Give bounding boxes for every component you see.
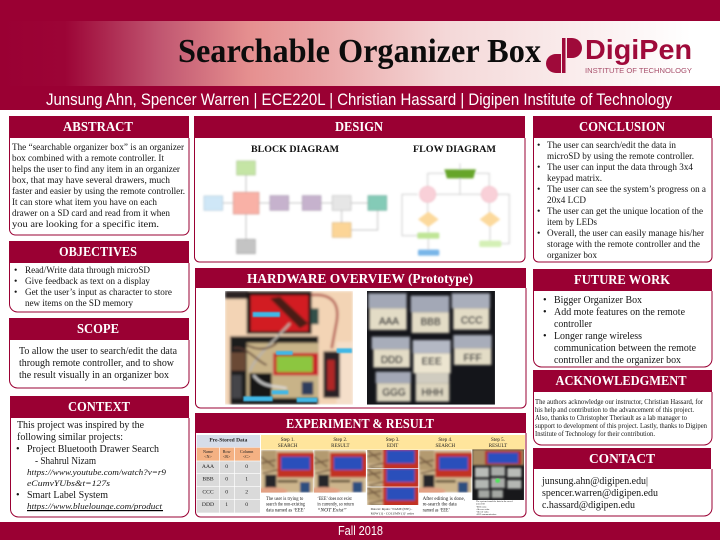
table: pre-stored data: 0 — [225, 477, 228, 483]
flow diagram — [402, 163, 509, 256]
future work list — [543, 295, 696, 366]
table: pre-stored data: DDD — [202, 502, 214, 508]
step captions: search the non-existing — [266, 502, 305, 508]
conclusion list — [537, 141, 707, 261]
heading: design: DESIGN — [335, 120, 383, 135]
acknowledgment text: his help and contribution to the advancement of this project. — [535, 406, 694, 414]
context text: Smart Label System — [27, 490, 108, 501]
panel: design — [194, 116, 525, 262]
step captions: ROW (1) - COLUMN (1)’ order — [371, 511, 415, 515]
step headers: RESULT — [331, 444, 350, 449]
step headers: SEARCH — [435, 444, 456, 449]
table: pre-stored data: 2 — [245, 490, 248, 496]
heading: conclusion: CONCLUSION — [579, 120, 665, 135]
block diagram heading: BLOCK DIAGRAM — [251, 145, 339, 155]
table: pre-stored data: 0 — [225, 464, 228, 470]
photo: labelled organizer drawers: HHH — [421, 388, 443, 399]
conclusion list: organizer box — [547, 251, 597, 261]
step captions: The system found the data in the saved — [476, 500, 513, 503]
photo: labelled organizer drawers: DDD — [381, 355, 402, 366]
acknowledgment text: Institute of Technology for their contribution. — [535, 430, 655, 438]
footer band — [0, 522, 720, 540]
conclusion list: Overall, the user can easily manage his/her — [547, 229, 705, 239]
future work list: • — [543, 307, 547, 318]
title: Searchable Organizer Box — [178, 33, 541, 70]
table: pre-stored data: CCC — [202, 490, 214, 496]
abstract text: drawer on a SD card and read from it when — [12, 208, 170, 219]
heading: hardware overview: HARDWARE OVERVIEW (Prototype) — [247, 272, 473, 287]
table: pre-stored data: AAA — [202, 464, 215, 470]
photo: labelled organizer drawers — [367, 291, 495, 405]
context text: https://www.bluelounge.com/product — [27, 501, 163, 511]
step captions — [266, 495, 513, 516]
panel: acknowledgment — [533, 370, 712, 445]
flow diagram heading: FLOW DIAGRAM — [413, 145, 496, 155]
panel: context — [10, 396, 189, 517]
authors line: Junsung Ahn, Spencer Warren | ECE220L | Christian Hassard | Digipen Institute of Technology — [46, 91, 673, 109]
table: pre-stored data: 1 — [245, 477, 248, 483]
step captions: re-search the data — [423, 502, 457, 508]
photo: labelled organizer drawers: CCC — [461, 316, 482, 327]
scope text: the result visually in an organizer box — [19, 370, 170, 381]
panel: contact — [533, 448, 712, 516]
future work list: controller — [554, 319, 593, 330]
step headers: Step 4. — [438, 438, 452, 443]
footer text: Fall 2018 — [338, 524, 383, 538]
step headers: Step 5. — [491, 438, 505, 443]
photo: labelled organizer drawers: EEE — [422, 356, 442, 367]
step captions: data named as ‘EEE’ — [266, 507, 305, 514]
photos: LCD steps — [254, 443, 524, 525]
heading: future work: FUTURE WORK — [574, 273, 670, 288]
table: pre-stored data: Name — [203, 449, 213, 454]
future work list: Bigger Organizer Box — [554, 295, 643, 306]
step captions: -LED communication — [476, 513, 497, 516]
objectives list — [14, 266, 172, 309]
step headers: EDIT — [387, 444, 398, 449]
step headers: Step 3. — [386, 438, 400, 443]
conclusion list: • — [537, 141, 540, 151]
scope text — [19, 346, 177, 381]
conclusion list: 20x4 LCD — [547, 196, 586, 206]
table: pre-stored data: 0 — [225, 490, 228, 496]
acknowledgment text — [535, 398, 707, 438]
heading: acknowledgment: ACKNOWLEDGMENT — [556, 374, 687, 389]
abstract text: helps the user to find any item in an organizer — [12, 164, 181, 175]
contact emails: junsung.ahn@digipen.edu| — [541, 476, 648, 487]
conclusion list: storage with the remote controller and the — [547, 240, 700, 250]
table: pre-stored data: Column — [240, 449, 254, 454]
context text: Project Bluetooth Drawer Search — [27, 444, 160, 455]
step captions: “NOT Exist” — [317, 507, 347, 514]
context text: This project was inspired by the — [17, 420, 144, 431]
conclusion list: The user can input the data through 3x4 — [547, 163, 693, 173]
block diagram — [204, 161, 387, 254]
contact emails: spencer.warren@digipen.edu — [542, 488, 658, 499]
context text: - Shahrul Nizam — [35, 456, 96, 467]
objectives list: Get the user’s input as character to store — [25, 288, 172, 298]
icon: DigiPen logo mark — [546, 38, 582, 73]
panel: future work — [533, 269, 712, 367]
step captions: ‘EEE’ does not exist — [317, 495, 352, 502]
future work list: Longer range wireless — [554, 331, 642, 342]
step captions: -EEE name — [476, 505, 487, 508]
scope text: through remote controller, and to show — [19, 358, 175, 369]
page header band — [0, 0, 720, 110]
objectives list: • — [14, 266, 17, 276]
contact emails: c.hassard@digipen.edu — [542, 500, 635, 511]
context text: https://www.youtube.com/watch?v=r9 — [27, 467, 167, 477]
table: pre-stored data: 1 — [225, 502, 228, 508]
conclusion list: • — [537, 229, 540, 239]
context text: eCumvYUbs&t=127s — [27, 478, 111, 488]
table: pre-stored data: Pre-Stored Data — [209, 438, 248, 444]
table: pre-stored data: <R> — [223, 454, 231, 459]
panel: abstract — [9, 116, 189, 235]
acknowledgment text: The authors acknowledge our instructor, Christian Hassard, for — [535, 398, 704, 406]
photo: prototype electronics — [225, 291, 353, 405]
table: pre-stored data: <N> — [204, 454, 212, 459]
acknowledgment text: Also, thanks to Christopher Theriault as a lab manager to — [535, 414, 687, 422]
heading: scope: SCOPE — [77, 322, 119, 337]
photo: labelled organizer drawers: AAA — [379, 316, 399, 327]
heading: objectives: OBJECTIVES — [59, 245, 137, 260]
heading: abstract: ABSTRACT — [63, 120, 134, 135]
abstract text: faster and easier by using the remote controller. — [12, 186, 185, 197]
objectives list: Give feedback as text on a display — [25, 276, 150, 287]
logo subtitle: INSTITUTE OF TECHNOLOGY — [585, 66, 692, 75]
panel: hardware overview — [195, 268, 526, 408]
table: pre-stored data: 0 — [245, 502, 248, 508]
heading: context: CONTEXT — [68, 400, 131, 415]
conclusion list: item by LEDs — [547, 218, 597, 228]
table: pre-stored data: 0 — [245, 464, 248, 470]
photo: labelled organizer drawers: FFF — [463, 353, 482, 364]
future work list: communication between the remote — [554, 343, 696, 354]
panel: experiment and result — [195, 413, 526, 525]
context text: following similar projects: — [17, 432, 123, 443]
abstract text — [12, 142, 185, 230]
context text — [16, 420, 167, 511]
logo wordmark: DigiPen — [585, 34, 692, 65]
step headers: SEARCH — [278, 444, 298, 449]
future work list: • — [543, 295, 547, 306]
conclusion list: • — [537, 163, 540, 173]
abstract text: box combined with a remote controller. It — [12, 153, 164, 164]
conclusion list: The user can see the system’s progress on a — [547, 185, 707, 195]
step captions: The user is trying to — [266, 496, 304, 502]
abstract text: The “searchable organizer box” is an organizer — [12, 142, 185, 153]
table: pre-stored data — [197, 435, 260, 513]
step captions: After editing is done, — [423, 495, 466, 502]
conclusion list: The user can get the unique location of the — [547, 206, 703, 217]
step captions: -1th row value — [476, 508, 490, 511]
objectives list: • — [14, 288, 17, 298]
conclusion list: • — [537, 207, 540, 217]
step captions: Data in: Inputs: ‘NAME (EEE) - — [371, 506, 412, 511]
table: pre-stored data: <C> — [243, 454, 251, 459]
photo: labelled organizer drawers: GGG — [382, 388, 406, 399]
step captions: -1th col value — [476, 511, 489, 514]
future work list: controller and the organizer box — [554, 355, 682, 366]
contact emails — [541, 476, 658, 511]
heading: experiment and result: EXPERIMENT & RESULT — [286, 417, 435, 432]
objectives list: new items on the SD memory — [25, 299, 133, 309]
table: pre-stored data: BBB — [202, 477, 214, 483]
step captions: microSD: — [476, 503, 485, 506]
photo: labelled organizer drawers: BBB — [421, 317, 441, 328]
scope text: To allow the user to search/edit the data — [19, 346, 177, 357]
step headers: Step 2. — [333, 438, 347, 443]
context text: • — [16, 444, 20, 455]
heading: contact: CONTACT — [589, 452, 656, 467]
step headers: RESULT — [489, 444, 507, 449]
step headers: Step 1. — [281, 438, 295, 443]
future work list: Add mote features on the remote — [554, 307, 685, 318]
conclusion list: microSD by using the remote controller. — [547, 152, 694, 162]
abstract text: you are looking for a specific item. — [12, 219, 159, 230]
objectives list: Read/Write data through microSD — [25, 266, 150, 276]
abstract text: It can store what item you have on each — [12, 197, 157, 208]
panel: conclusion — [533, 116, 712, 262]
abstract text: box, that may have several drawers, much — [12, 175, 170, 186]
context text: • — [16, 490, 20, 501]
acknowledgment text: support to development of this project. Lastly, thanks to Digipen — [535, 422, 707, 430]
objectives list: • — [14, 277, 17, 287]
step headers — [261, 435, 525, 450]
step captions: in currently, so return — [317, 502, 354, 508]
conclusion list: The user can search/edit the data in — [547, 141, 676, 151]
step captions: named as ‘EEE’ — [423, 507, 450, 514]
table: pre-stored data: Row — [223, 449, 231, 454]
future work list: • — [543, 331, 547, 342]
panel: scope — [9, 318, 189, 388]
conclusion list: • — [537, 185, 540, 195]
panel: objectives — [9, 241, 189, 312]
conclusion list: keypad matrix. — [547, 174, 602, 184]
